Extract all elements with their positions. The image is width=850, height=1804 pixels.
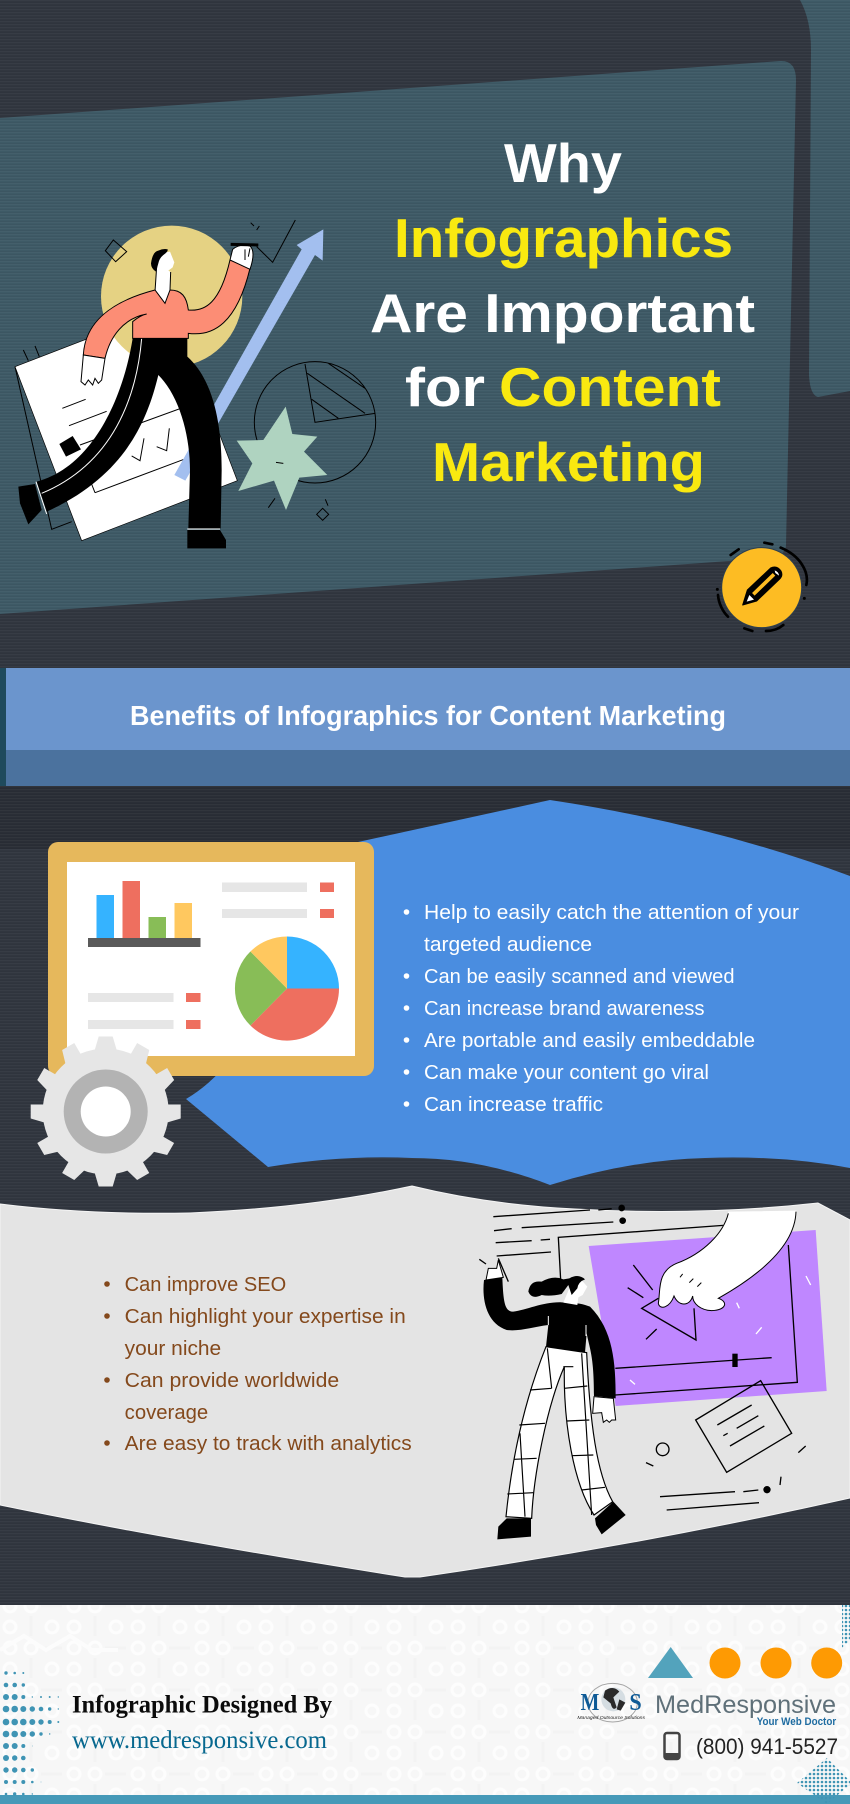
lower hand xyxy=(593,1397,616,1422)
right hand with marker xyxy=(230,244,258,269)
benefits list: blue panel: Can be easily scanned and viewed xyxy=(424,966,734,988)
title line: Marketing: Marketing xyxy=(432,431,705,493)
benefits list: gray panel: Can improve SEO xyxy=(125,1274,286,1296)
title line: Infographics: Infographics xyxy=(394,207,733,269)
white document xyxy=(15,307,237,541)
screen frame and slider xyxy=(558,1225,797,1395)
halftone dots: top right xyxy=(842,1605,850,1648)
left hand xyxy=(81,355,105,385)
benefits list: blue panel xyxy=(404,902,799,1116)
footer pattern xyxy=(0,1605,850,1795)
black sweater xyxy=(483,1277,616,1398)
purple screen xyxy=(589,1230,827,1406)
benefits list: blue panel: Can increase brand awareness xyxy=(424,998,704,1020)
hero panel: main teal board xyxy=(0,61,796,614)
hero panel: teal back tab xyxy=(800,0,850,397)
pie chart xyxy=(235,936,339,1041)
logo text: MedResponsive: MedResponsive xyxy=(655,1691,836,1719)
small diamond xyxy=(105,240,127,262)
bar chart xyxy=(88,881,200,947)
credit heading: Infographic Designed By xyxy=(72,1692,332,1718)
tagline: Your Web Doctor xyxy=(757,1716,837,1728)
footer xyxy=(0,1605,850,1804)
halftone dots: bottom right xyxy=(797,1758,850,1804)
pie outline xyxy=(254,362,376,483)
back paper outline xyxy=(15,346,72,529)
title line: Content: Content xyxy=(499,356,721,418)
panel: blue benefits shape xyxy=(186,800,850,1185)
footer chevrons xyxy=(0,1636,118,1650)
text lines and dots xyxy=(493,1205,626,1256)
ponytail hair xyxy=(528,1276,585,1297)
header bar xyxy=(0,668,850,786)
title line: Are Important: Are Important xyxy=(370,282,755,344)
play triangle and sparks xyxy=(628,1265,696,1340)
logo: MOS xyxy=(577,1683,646,1722)
shoes xyxy=(497,1502,626,1539)
neck and face xyxy=(155,252,174,303)
icon: phone xyxy=(664,1733,680,1759)
title line: for: for xyxy=(405,356,485,418)
mint star xyxy=(237,407,327,510)
benefits list: gray panel: your niche xyxy=(125,1338,221,1360)
benefits list: gray panel xyxy=(104,1274,412,1455)
big white hand xyxy=(658,1211,797,1311)
yellow circle xyxy=(101,226,242,367)
designer credit xyxy=(72,1692,332,1754)
icon: pencil badge xyxy=(716,543,807,631)
dashboard board illustration xyxy=(48,842,374,1076)
hair xyxy=(151,249,168,272)
board frame xyxy=(48,842,374,1076)
white sparks xyxy=(630,1276,811,1384)
logo: MOS: Managed Outsource Solutions xyxy=(577,1715,646,1721)
teal bottom strip xyxy=(0,1795,850,1804)
shoes xyxy=(18,484,226,548)
neck outline xyxy=(155,267,171,292)
small marks and lower lines xyxy=(646,1443,806,1510)
sticky note xyxy=(696,1381,792,1472)
footer shapes: triangle and dots xyxy=(648,1647,842,1678)
white check trousers xyxy=(506,1347,613,1518)
benefits list: blue panel: Help to easily catch the attention of your xyxy=(424,902,799,924)
neck and face xyxy=(563,1278,587,1305)
light blue band xyxy=(6,668,850,750)
footer background xyxy=(0,1605,850,1804)
blue growth arrow xyxy=(174,229,323,481)
benefits list: gray panel: Can highlight your expertise in xyxy=(125,1306,406,1328)
logo: MOS: S xyxy=(629,1690,642,1716)
trouser stripe and hems xyxy=(36,338,220,529)
benefits list: gray panel: Can provide worldwide xyxy=(125,1370,339,1392)
board screen xyxy=(67,862,355,1056)
title xyxy=(370,132,755,493)
benefits list: blue panel: Are portable and easily embeddable xyxy=(424,1030,755,1052)
dark left edge xyxy=(0,668,6,786)
logo: MOS: M xyxy=(581,1690,599,1716)
benefits list: gray panel: Are easy to track with analytics xyxy=(125,1433,412,1455)
small marks xyxy=(268,462,329,520)
raised hand with pen xyxy=(479,1258,508,1282)
coral shirt xyxy=(83,260,250,358)
phone number: (800) 941-5527 xyxy=(696,1734,838,1759)
title line: Why: Why xyxy=(504,132,622,194)
white sweater highlights xyxy=(548,1316,586,1336)
darker band under the header bar xyxy=(0,786,850,849)
icon: gear xyxy=(31,1036,181,1186)
benefits list: blue panel: targeted audience xyxy=(424,934,592,956)
illustration: woman and big hand xyxy=(479,1205,827,1539)
section heading: Benefits of Infographics for Content Marketing xyxy=(130,700,726,731)
benefits list: blue panel: Can make your content go viral xyxy=(424,1062,709,1084)
zigzag chart line xyxy=(251,220,295,262)
benefits list: gray panel: coverage xyxy=(125,1402,208,1424)
halftone dots: left xyxy=(3,1671,59,1796)
hero illustration: man drawing a chart xyxy=(15,220,376,548)
benefits list: blue panel: Can increase traffic xyxy=(424,1094,603,1116)
darker blue band xyxy=(6,750,850,786)
legend rows xyxy=(88,882,334,1029)
panel: gray benefits shape xyxy=(0,1186,850,1577)
trousers xyxy=(37,338,222,528)
credit url: www.medresponsive.com xyxy=(72,1727,328,1754)
